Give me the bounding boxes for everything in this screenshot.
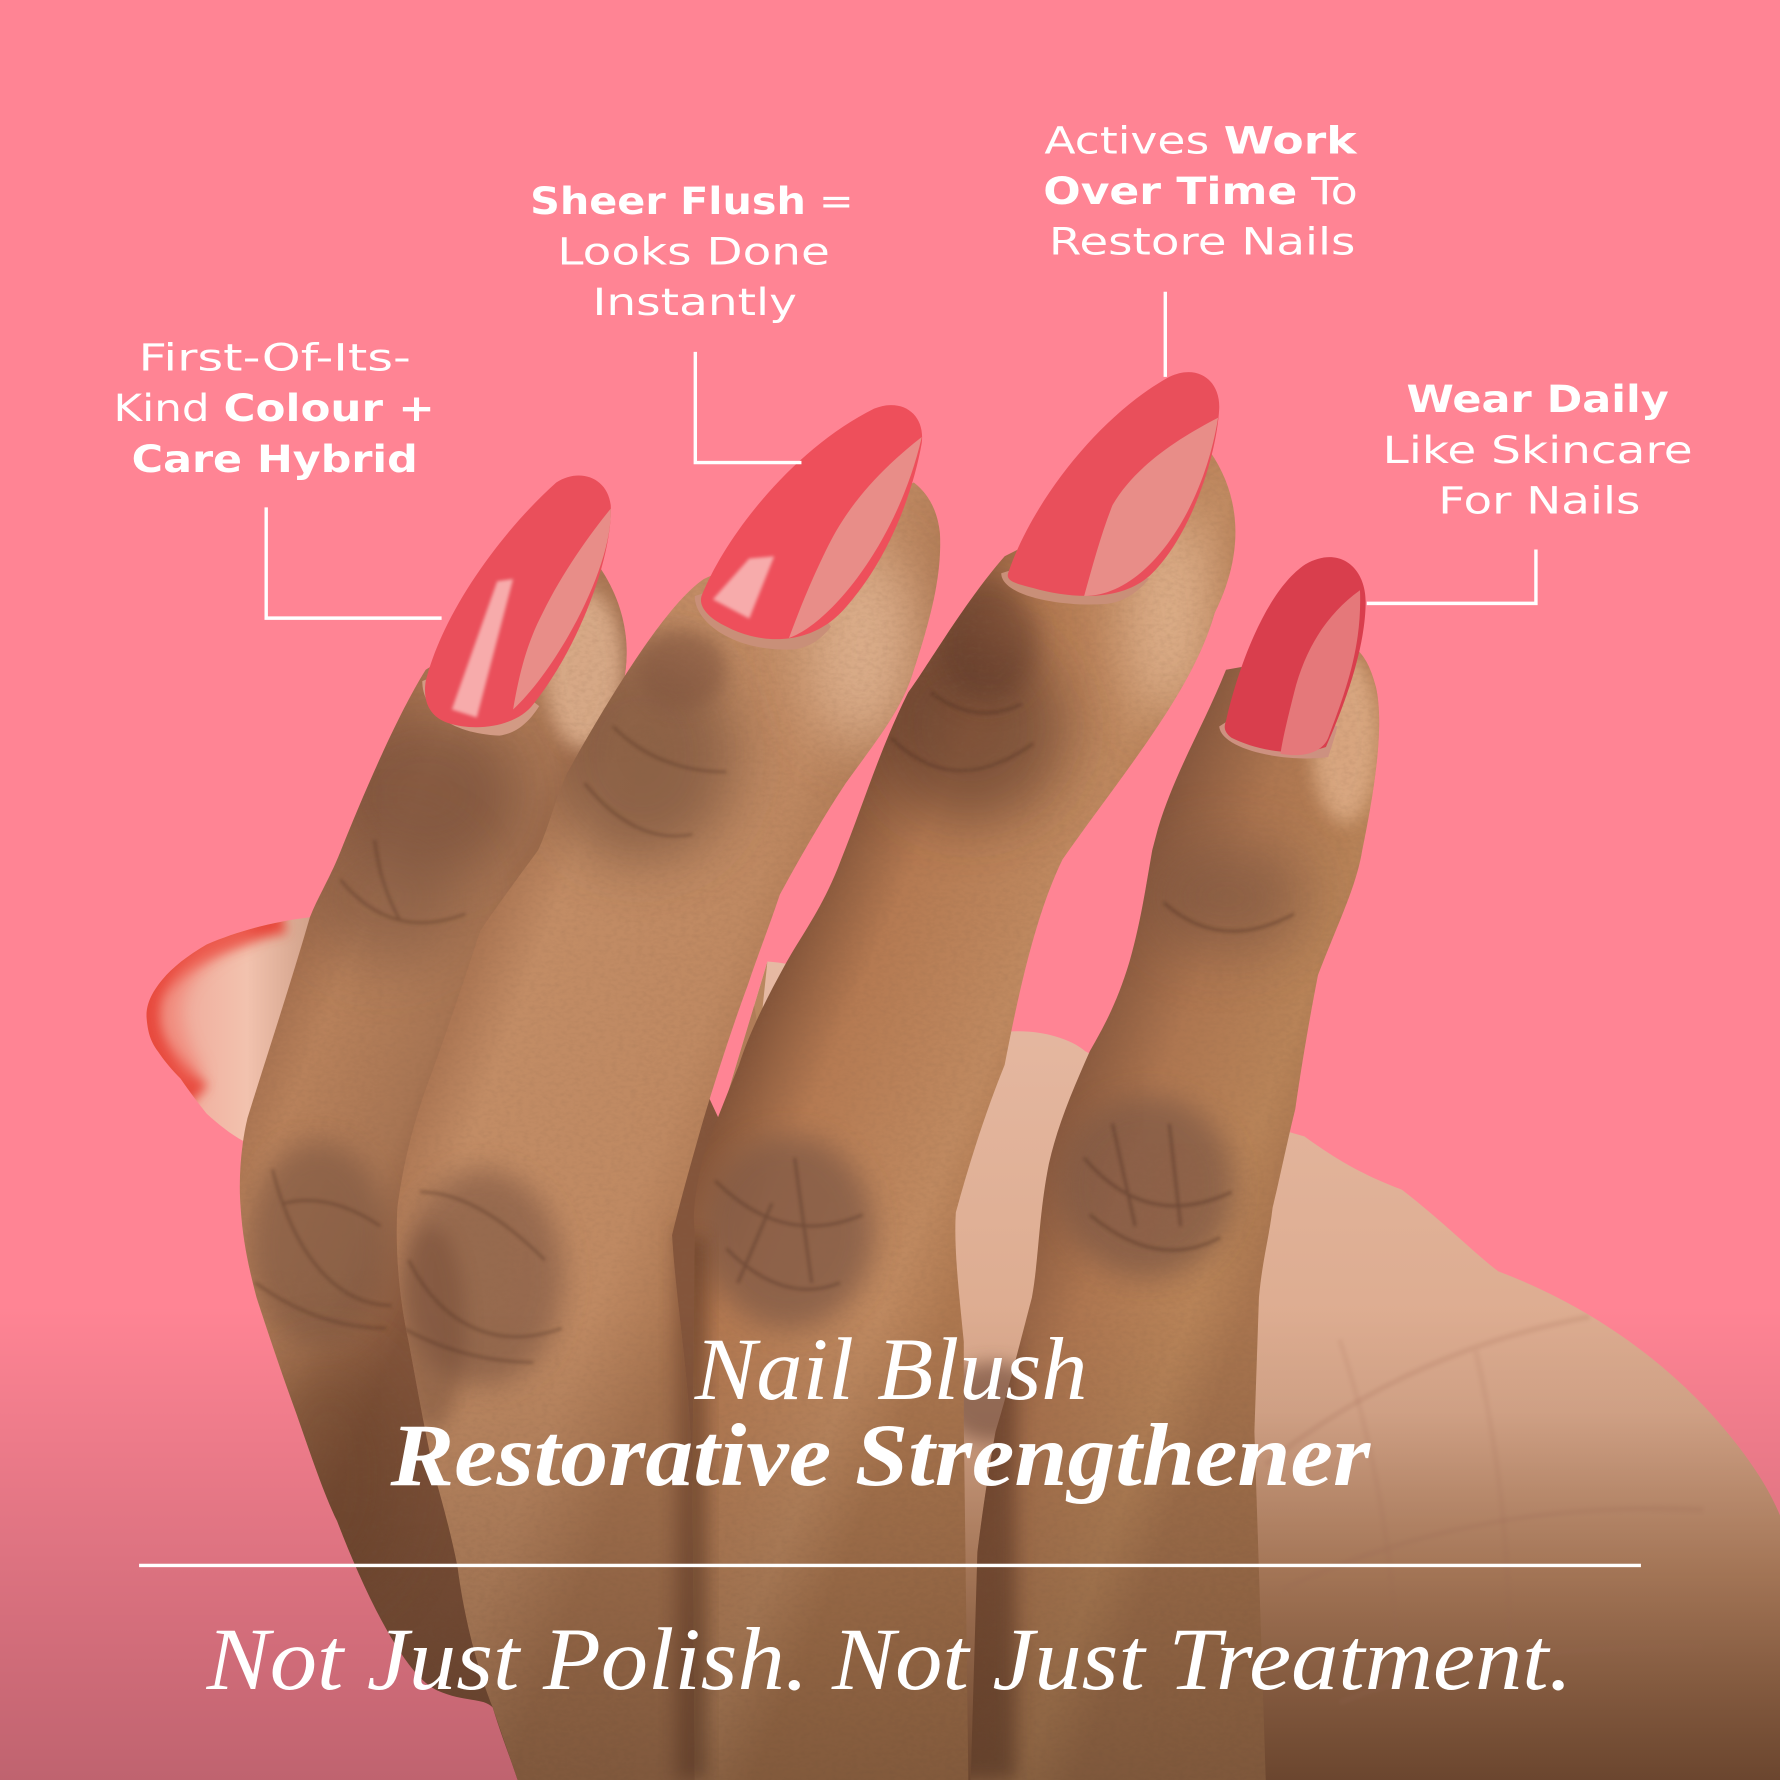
callout text: Actives Work (1044, 118, 1358, 162)
finger 2 (397, 482, 940, 1780)
nail 3 (1001, 372, 1219, 605)
skin texture (500, 531, 1372, 1136)
callout text: Kind Colour + (114, 386, 435, 430)
tagline: Not Just Polish. Not Just Treatment. (206, 1611, 1572, 1709)
finger 4 (948, 647, 1379, 1780)
callout text: Restore Nails (1049, 219, 1355, 263)
callout text (1043, 118, 1358, 263)
callout text (530, 179, 854, 324)
title: Nail Blush (694, 1321, 1088, 1419)
callout: actives work over time (1043, 118, 1358, 377)
hand photo illustration (146, 372, 1780, 1780)
title: Restorative Strengthener (389, 1407, 1372, 1505)
callout text: Care Hybrid (132, 437, 418, 481)
callout text: For Nails (1438, 479, 1640, 523)
callout text: Instantly (593, 280, 797, 324)
finger 1 (240, 569, 718, 1780)
callout text (1383, 377, 1693, 523)
title (389, 1321, 1372, 1505)
callout: wear daily (1367, 377, 1693, 603)
callout text: Looks Done (557, 230, 830, 274)
callout text: First-Of-Its- (138, 336, 411, 380)
finger 3 (681, 452, 1235, 1780)
leader line (266, 507, 442, 618)
palm (681, 954, 1780, 1780)
thumb with red nail (146, 917, 310, 1141)
callout text (114, 336, 435, 481)
callout: sheer flush (530, 179, 854, 463)
callout text: Sheer Flush = (530, 179, 854, 223)
nail 1 (422, 475, 611, 736)
callout text: Wear Daily (1407, 377, 1669, 421)
callout text: Over Time To (1043, 169, 1358, 213)
leader line (695, 352, 801, 463)
callout: colour and care hybrid (114, 336, 442, 618)
divider rule (139, 1564, 1641, 1567)
bottom shade (0, 1305, 1780, 1780)
nail 4 (1219, 557, 1366, 758)
leader line (1164, 292, 1167, 377)
leader line (1367, 549, 1536, 603)
callout text: Like Skincare (1383, 428, 1693, 472)
nail 2 (695, 405, 922, 650)
